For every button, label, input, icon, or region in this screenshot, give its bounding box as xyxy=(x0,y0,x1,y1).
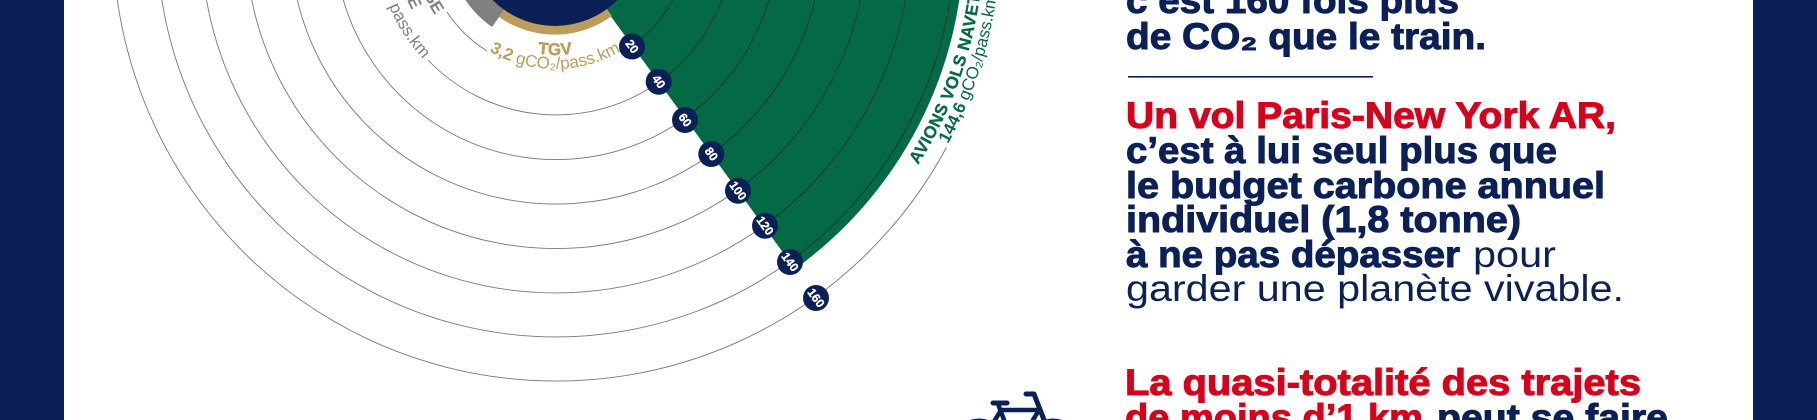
scale marker dots: 160 xyxy=(804,286,828,310)
icon: bicycle xyxy=(954,394,1078,420)
scale rings on white background xyxy=(113,0,946,381)
text block: Paris-New York flight: individuel (1,8 tonne) xyxy=(1126,199,1521,240)
scale marker dots xyxy=(619,34,829,311)
text block: short trips by bike xyxy=(1125,362,1668,420)
text block: Paris-New York flight xyxy=(1126,95,1624,309)
scale marker dots: 80 xyxy=(702,144,721,164)
text block: Paris-New York flight: Un vol Paris-New York AR, xyxy=(1126,95,1616,136)
text block: Paris-New York flight: pour xyxy=(1473,234,1556,275)
navy centre disc xyxy=(467,0,643,26)
scale marker dots: 100 xyxy=(726,178,750,203)
text block: Paris-New York flight: le budget carbone annuel xyxy=(1126,165,1605,206)
scale rings inside green sector xyxy=(632,0,955,261)
text block: short trips by bike: La quasi-totalité des trajets xyxy=(1125,362,1641,403)
text block: Paris-New York flight: c’est à lui seul plus que xyxy=(1126,130,1557,171)
text block: train comparison xyxy=(1126,0,1486,57)
label: TGV: TGV xyxy=(538,42,572,56)
scale marker dots: 40 xyxy=(649,72,668,91)
left navy border xyxy=(0,0,64,420)
right navy border xyxy=(1753,0,1817,420)
tan sector: TGV xyxy=(499,0,612,35)
text block: train comparison: de CO₂ que le train. xyxy=(1126,16,1486,57)
radial chart: CO2 per passenger km xyxy=(116,0,996,382)
text block: Paris-New York flight: garder une planète vivable. xyxy=(1126,268,1624,309)
scale marker dots: 60 xyxy=(675,110,695,130)
grey sector xyxy=(446,0,555,27)
scale marker dots: 20 xyxy=(622,37,642,56)
label: grey category value: pass.km xyxy=(386,4,428,58)
text block: Paris-New York flight: à ne pas dépasser xyxy=(1126,234,1460,275)
scale marker dots: 140 xyxy=(778,250,802,274)
label: TGV value: 3,2 gCO₂/pass.km xyxy=(490,42,620,72)
green sector: avions vols navettes xyxy=(556,0,964,269)
scale marker dots: 120 xyxy=(753,213,777,238)
